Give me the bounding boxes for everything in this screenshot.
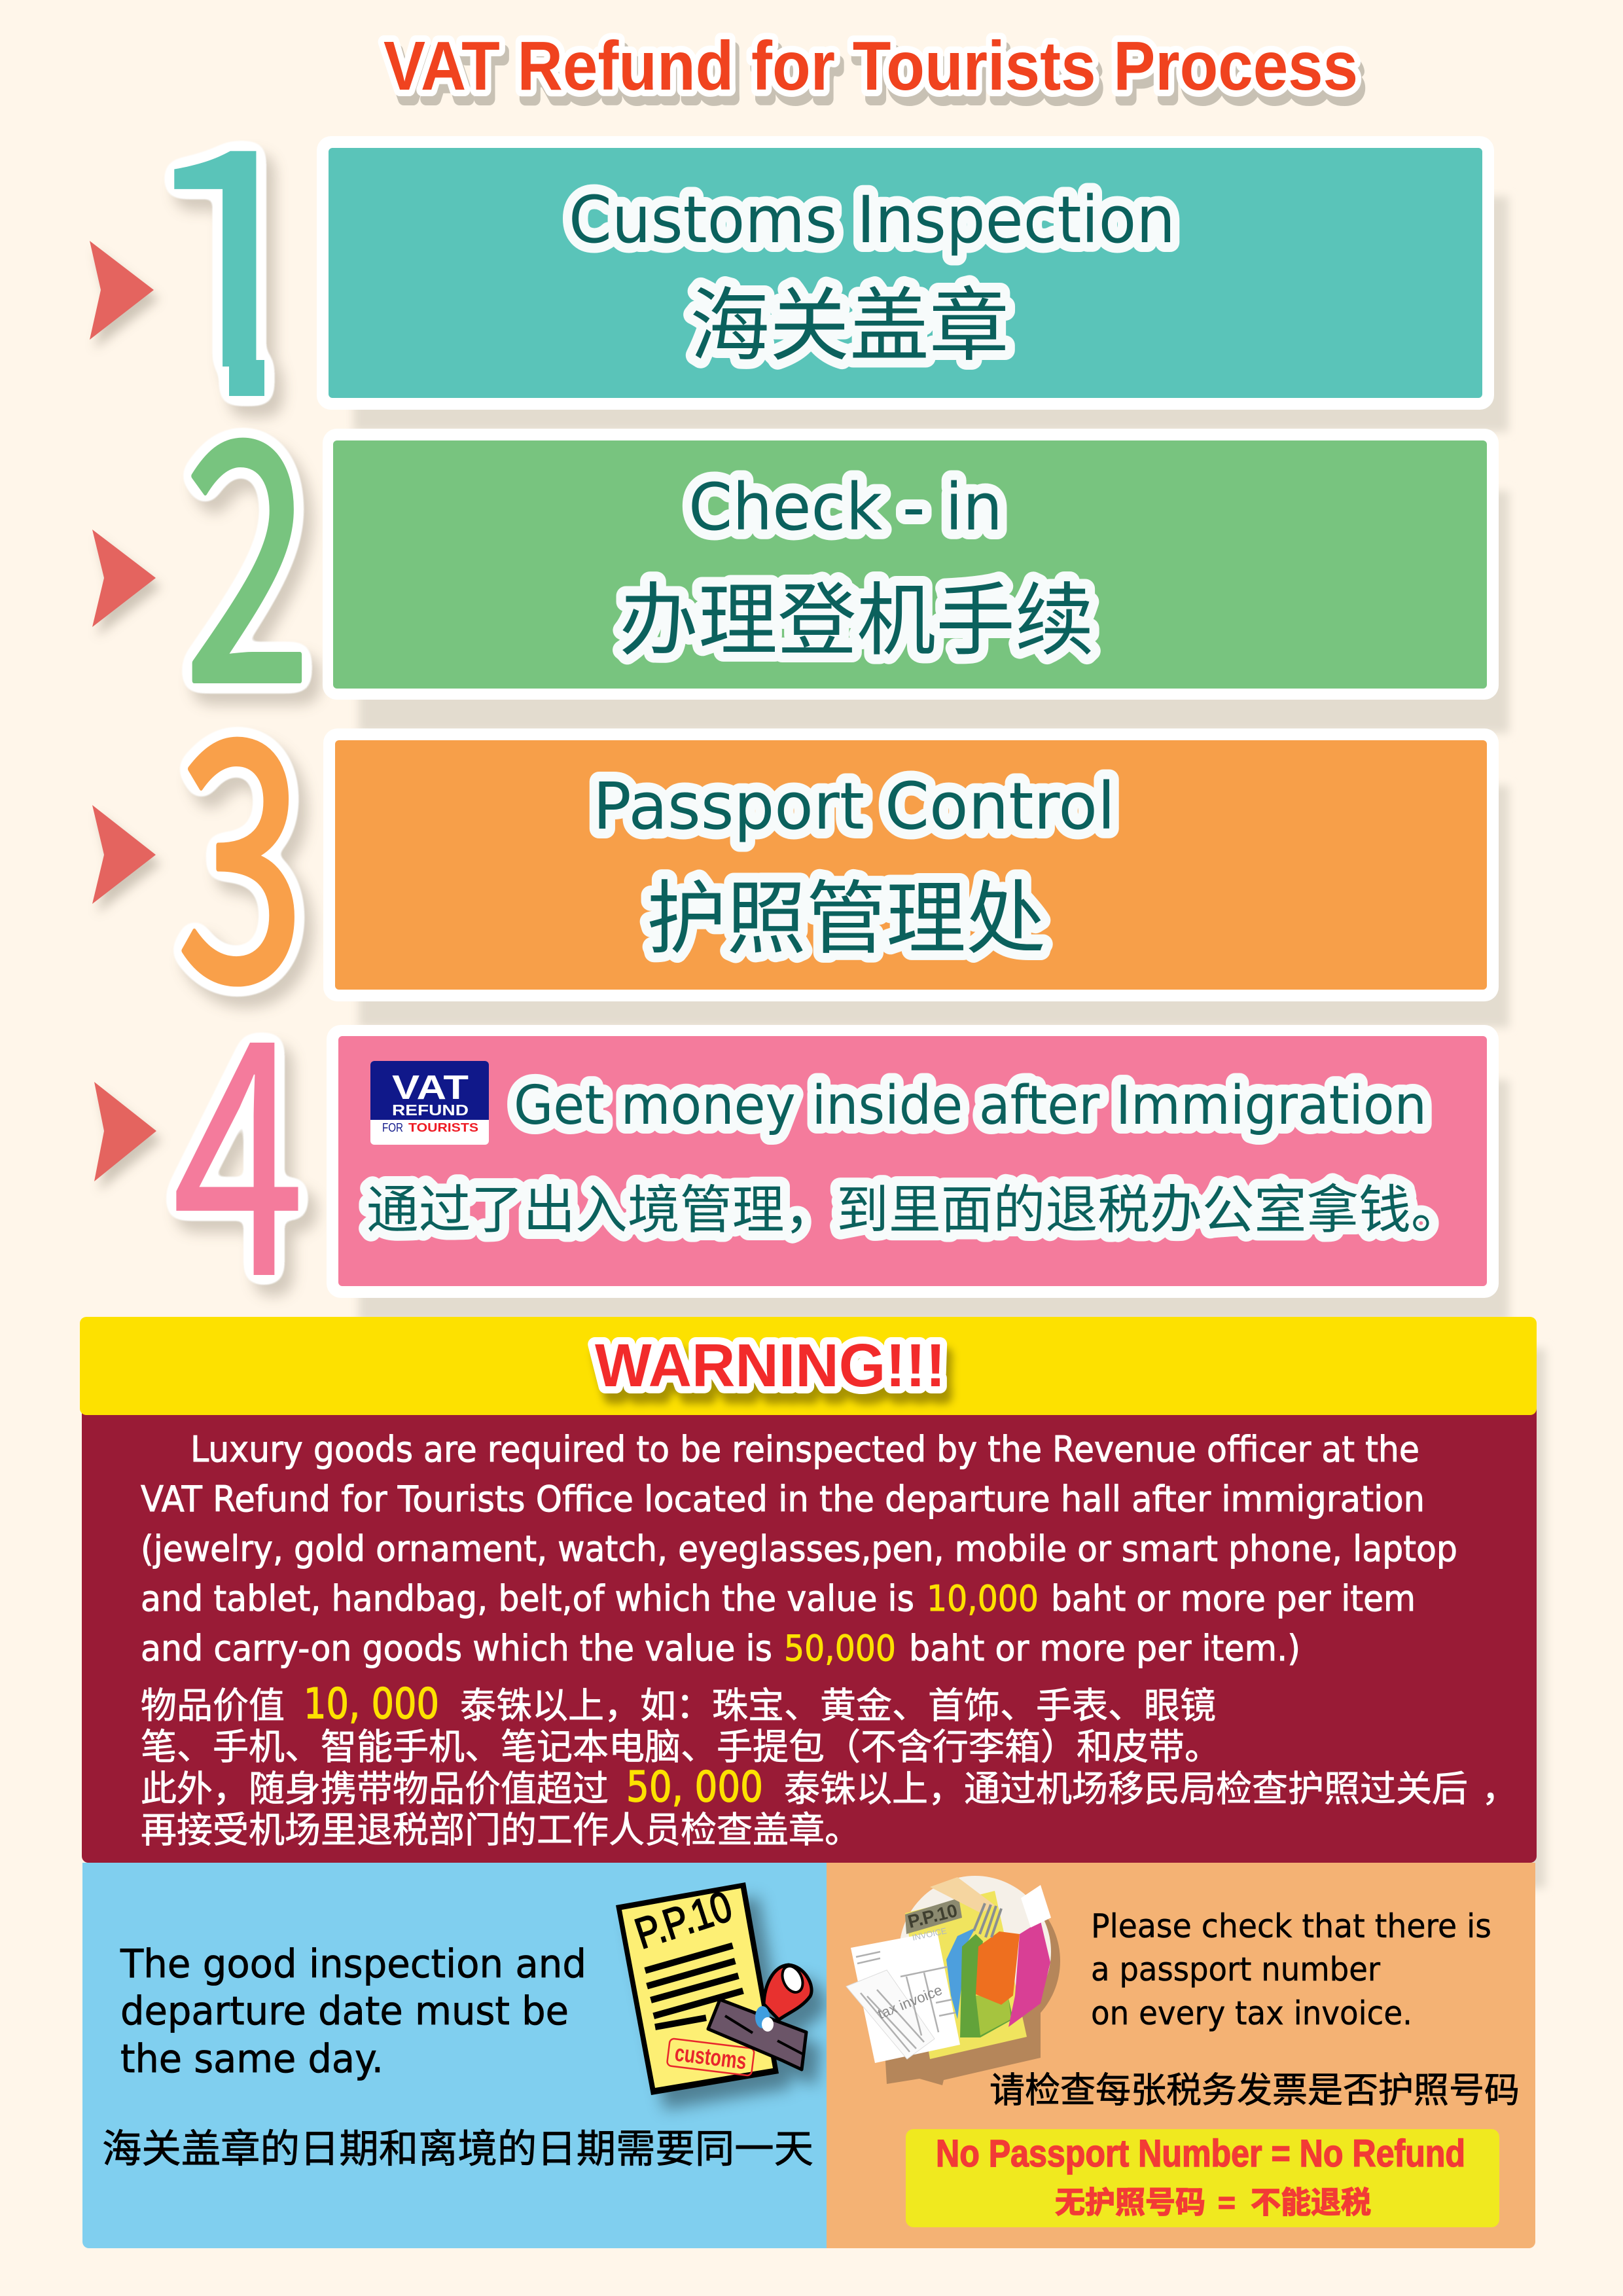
- number 4: 4: [171, 897, 306, 1369]
- warning paragraph chinese: 物品价值: [141, 1685, 285, 1726]
- card 4: [327, 1025, 1499, 1298]
- number 2: 2: [184, 296, 312, 776]
- title: VAT Refund for Tourists Process: [383, 27, 1358, 105]
- arrow 2: [92, 529, 156, 627]
- panel: step 1: [90, 0, 1494, 495]
- heading: Passport Control: Passport Control: [593, 769, 1115, 844]
- heading: chinese 1: 海关盖章: [690, 281, 1009, 370]
- heading: chinese 3: 护照管理处: [647, 874, 1046, 963]
- icon: P.P.10 form with customs stamp: customs: [673, 2039, 748, 2075]
- warning paragraph english: Luxury goods are required to be reinspected by the Revenue officer at the: [190, 1429, 1419, 1470]
- warning paragraph chinese: 泰铢以上，通过机场移民局检查护照过关后: [784, 1768, 1468, 1809]
- icon: P.P.10 form with customs stamp: [616, 1882, 812, 2095]
- panel: warning body: [82, 1401, 1537, 1863]
- warning paragraph english: and carry-on goods which the value is: [141, 1628, 772, 1669]
- text block english: Please check that there is: [1091, 1907, 1491, 1945]
- text block chinese: 海关盖章的日期和离境的日期需要同一天: [102, 2126, 813, 2171]
- card 1: [317, 136, 1494, 410]
- number 1: [165, 141, 290, 424]
- warning paragraph chinese: 10, 000: [304, 1680, 439, 1729]
- text block english: on every tax invoice.: [1091, 1994, 1412, 2032]
- panel: step 2: [92, 296, 1499, 776]
- heading: Customs Inspection: Customs Inspection: [569, 183, 1175, 258]
- text block english: [120, 1941, 586, 2082]
- warning paragraph english: baht or more per item.): [909, 1628, 1300, 1669]
- warning paragraph chinese: 再接受机场里退税部门的工作人员检查盖章。: [141, 1810, 861, 1850]
- icon: shopping bags and tax invoices: INVOICE: [912, 1926, 948, 1943]
- warning paragraph english: VAT Refund for Tourists Office located in the departure hall after immigration: [141, 1479, 1425, 1520]
- warning paragraph chinese: [141, 1680, 1518, 1850]
- callout: no passport number no refund: No Passport Number = No Refund: [936, 2132, 1465, 2175]
- icon: shopping bags and tax invoices: [846, 1876, 1060, 2085]
- text block chinese: 请检查每张税务发票是否护照号码: [990, 2071, 1520, 2110]
- heading: Get money inside after Immigration: Get money inside after Immigration: [514, 1075, 1427, 1137]
- heading: Check - in: Check - in: [688, 470, 1003, 545]
- callout: no passport number no refund: =: [1218, 2185, 1236, 2219]
- warning paragraph english: (jewelry, gold ornament, watch, eyeglasses,pen, mobile or smart phone, laptop: [141, 1528, 1457, 1570]
- panel: step 4: [94, 897, 1499, 1369]
- warning panel shadow: [131, 1348, 1546, 1888]
- text block english: the same day.: [120, 2036, 383, 2082]
- heading: chinese 2: 办理登机手续: [619, 576, 1094, 665]
- icon: P.P.10 form with customs stamp: P.P.10: [629, 1882, 738, 1958]
- heading: WARNING!!!: WARNING!!!: [595, 1331, 946, 1399]
- callout: no passport number no refund: 不能退税: [1251, 2185, 1371, 2219]
- panel: passport number check: [827, 1863, 1535, 2248]
- warning paragraph english: baht or more per item: [1051, 1578, 1416, 1619]
- warning paragraph chinese: 此外，随身携带物品价值超过: [141, 1768, 609, 1809]
- logo: VAT refund for tourists: FOR: [382, 1121, 403, 1134]
- logo: VAT refund for tourists: VAT: [392, 1069, 469, 1107]
- text block english: [1091, 1907, 1491, 2032]
- warning paragraph chinese: 50, 000: [626, 1763, 763, 1812]
- logo: VAT refund for tourists: TOURISTS: [408, 1121, 478, 1134]
- warning paragraph english: [141, 1429, 1457, 1669]
- callout: no passport number no refund: [906, 2129, 1499, 2227]
- icon: shopping bags and tax invoices: tax invoice: [876, 1982, 944, 2022]
- icon: shopping bags and tax invoices: P.P.10: [906, 1900, 959, 1932]
- callout: no passport number no refund: 无护照号码: [1055, 2185, 1205, 2219]
- arrow 3: [92, 805, 156, 904]
- number 1: 1: [130, 0, 334, 495]
- number 3: 3: [177, 596, 306, 1075]
- card 2: [323, 429, 1499, 700]
- text block english: a passport number: [1091, 1950, 1380, 1988]
- panel: same day inspection: [82, 1863, 827, 2248]
- text block english: departure date must be: [120, 1988, 569, 2034]
- warning paragraph english: 10,000: [927, 1578, 1039, 1619]
- panel: warning header: [80, 1317, 1537, 1415]
- warning paragraph chinese: 泰铢以上，如：珠宝、黄金、首饰、手表、眼镜: [460, 1685, 1216, 1726]
- warning paragraph chinese: 笔、手机、智能手机、笔记本电脑、手提包（不含行李箱）和皮带。: [141, 1727, 1221, 1767]
- panel: step 3: [92, 596, 1499, 1075]
- heading: chinese 4: 通过了出入境管理，到里面的退税办公室拿钱。: [366, 1181, 1463, 1239]
- warning paragraph english: and tablet, handbag, belt,of which the value is: [141, 1578, 914, 1619]
- logo: VAT refund for tourists: [370, 1061, 489, 1145]
- text block english: The good inspection and: [120, 1941, 586, 1987]
- arrow 4: [94, 1082, 156, 1181]
- logo: VAT refund for tourists: REFUND: [392, 1102, 469, 1119]
- card 3: [323, 728, 1499, 1001]
- card shadows: [353, 196, 1509, 1322]
- arrow 1: [90, 241, 154, 340]
- warning paragraph chinese: ，: [1482, 1768, 1518, 1809]
- warning paragraph english: 50,000: [784, 1628, 896, 1669]
